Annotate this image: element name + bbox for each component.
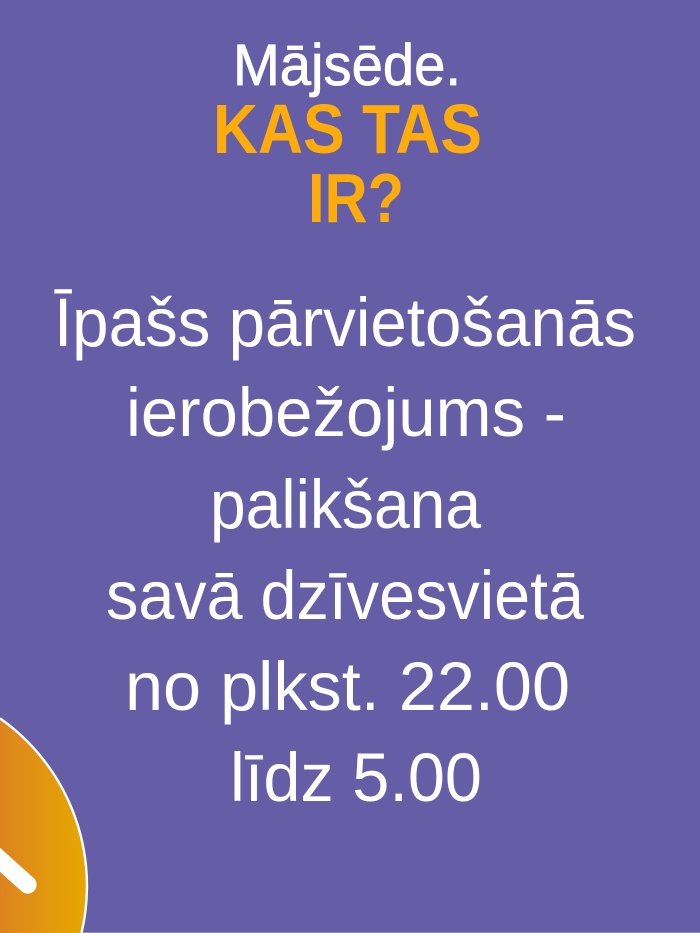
icon: clock partial (0, 718, 87, 933)
body text block (54, 284, 636, 816)
title line: Mājsēde.: Mājsēde. (233, 33, 461, 98)
clock face (0, 718, 87, 933)
body line 2: ierobežojums - (126, 374, 566, 451)
title line: IR?: IR? (308, 159, 404, 237)
title line: KAS TAS: KAS TAS (213, 90, 482, 168)
body line 6: līdz 5.00 (230, 739, 482, 816)
title (213, 33, 482, 237)
body line 3: palikšana (210, 466, 482, 543)
clock hand (0, 848, 37, 894)
body line 1: Īpašs pārvietošanās (54, 284, 636, 361)
body line 4: savā dzīvesvietā (106, 557, 585, 634)
body line 5: no plkst. 22.00 (125, 648, 570, 725)
clock rim (0, 718, 87, 933)
